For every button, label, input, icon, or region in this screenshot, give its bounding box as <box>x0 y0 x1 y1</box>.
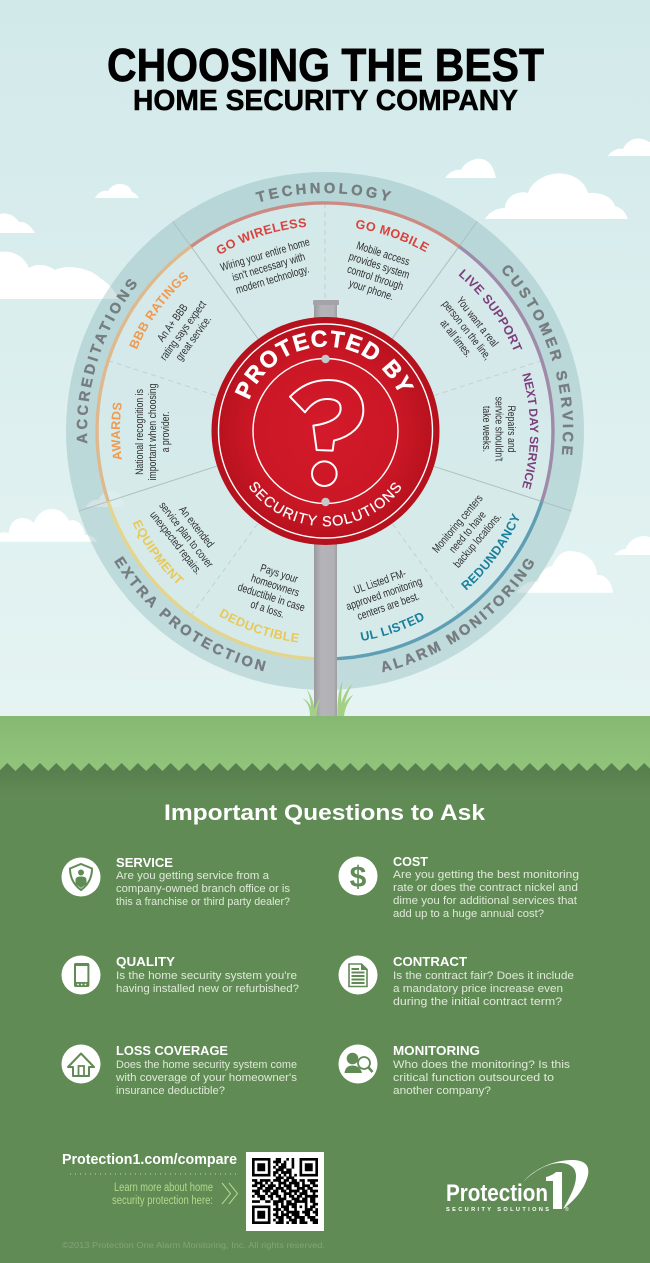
chevrons arrow <box>222 1183 238 1204</box>
icon: shield <box>62 858 100 896</box>
text: go wireless: Wiring your entire home <box>219 236 312 274</box>
dashed dividers <box>108 203 542 615</box>
logo tagline: SECURITY SOLUTIONS <box>446 1207 549 1213</box>
text: bbb ratings: great service. <box>174 314 215 363</box>
icon: document <box>338 956 378 994</box>
question: monitoring: Who does the monitoring? Is this <box>393 1059 570 1071</box>
dark green panel <box>0 763 650 1263</box>
wheel outer ring <box>66 172 584 690</box>
question: service: this a franchise or third party dealer? <box>116 896 290 908</box>
text: redundancy: need to have <box>447 509 489 556</box>
label: deductible: DEDUCTIBLE <box>219 608 299 642</box>
section name: customer service: CUSTOMER SERVICE <box>502 265 574 455</box>
question: loss coverage: LOSS COVERAGE <box>116 1043 228 1058</box>
question: quality: having installed new or refurbished? <box>116 983 299 995</box>
question: cost: COST <box>393 854 428 869</box>
text: ul listed: UL Listed FM- <box>352 568 408 597</box>
text: go mobile: your phone. <box>347 278 395 304</box>
text: ul listed: approved monitoring <box>345 576 424 613</box>
text: awards: National recognition is <box>134 389 146 475</box>
label: next day service: NEXT DAY SERVICE <box>522 372 538 490</box>
question: contract: Is the contract fair? Does it include <box>393 970 574 982</box>
text: live support: You want a real <box>454 295 500 350</box>
question: cost <box>338 854 579 920</box>
text: redundancy: backup locations. <box>452 511 504 571</box>
question mark <box>290 380 363 486</box>
text: bbb ratings: An A+ BBB <box>155 302 191 345</box>
question: loss coverage: insurance deductible? <box>116 1085 225 1097</box>
logo wordmark: Protection <box>446 1180 548 1207</box>
sign post <box>313 300 339 717</box>
text: next day service: service shouldn't <box>492 397 504 462</box>
text: deductible: of a loss. <box>249 599 286 621</box>
label: bbb ratings: BBB RATINGS <box>129 272 188 350</box>
colored arcs <box>97 203 553 659</box>
icon: dollar <box>338 856 378 896</box>
text: live support: at all times. <box>437 318 474 360</box>
text: next day service: take weeks. <box>480 406 492 452</box>
text: go mobile: provides system <box>347 251 411 282</box>
grass tufts <box>303 681 353 716</box>
icon: person and magnifier <box>338 1044 378 1084</box>
title: HOME SECURITY COMPANY <box>133 85 518 117</box>
section name: accreditations: ACCREDITATIONS <box>76 279 137 444</box>
question: cost: Are you getting the best monitoring <box>393 869 579 881</box>
section name: alarm monitoring: ALARM MONITORING <box>382 558 534 672</box>
question: contract: during the initial contract term? <box>393 996 562 1008</box>
icon: house <box>62 1044 100 1084</box>
question: monitoring: critical function outsourced to <box>393 1072 554 1084</box>
lawn <box>0 716 650 772</box>
sign text: security solutions: SECURITY SOLUTIONS <box>250 482 401 526</box>
text: redundancy: Monitoring centers <box>430 493 486 556</box>
question: contract: CONTRACT <box>393 954 467 969</box>
text: go wireless: modern technology. <box>234 264 311 297</box>
sign text: protected by: PROTECTED BY <box>234 330 414 400</box>
question: contract <box>338 954 574 1008</box>
text: equipment: An extended <box>176 504 216 550</box>
question: monitoring: MONITORING <box>393 1043 480 1058</box>
footer learn more text: Learn more about home <box>114 1182 213 1194</box>
text: next day service: Repairs and <box>505 405 517 453</box>
question: service: SERVICE <box>116 855 173 870</box>
question: cost: rate or does the contract nickel and <box>393 882 578 894</box>
text: equipment: service plan to cover <box>156 500 215 571</box>
question: loss coverage: Does the home security system come <box>116 1059 297 1071</box>
label: awards: AWARDS <box>111 402 122 460</box>
bolts <box>321 355 330 506</box>
section name: extra protection: EXTRA PROTECTION <box>114 556 266 672</box>
question: service: Are you getting service from a <box>116 870 270 882</box>
section name: technology: TECHNOLOGY <box>255 182 392 202</box>
sign <box>212 317 440 545</box>
question: service: company-owned branch office or is <box>116 883 290 895</box>
logo swoosh <box>523 1160 588 1209</box>
text: deductible: homeowners <box>249 573 301 600</box>
text: equipment: unexpected repairs. <box>147 509 204 577</box>
text: awards: important when choosing <box>147 383 159 481</box>
question: quality <box>62 954 299 995</box>
label: go mobile: GO MOBILE <box>356 220 430 252</box>
icon: tablet <box>62 956 100 994</box>
icon: dollar: $ <box>350 861 367 894</box>
question: monitoring <box>338 1043 570 1097</box>
text: ul listed: centers are best. <box>356 591 421 623</box>
question: contract: a mandatory price increase even <box>393 983 563 995</box>
text: bbb ratings: rating says expect <box>158 299 209 363</box>
wheel inner disk <box>97 203 553 659</box>
title <box>107 39 544 117</box>
question: monitoring: another company? <box>393 1085 491 1097</box>
label: redundancy: REDUNDANCY <box>460 512 520 590</box>
question: quality: QUALITY <box>116 954 175 969</box>
question: service <box>62 855 290 908</box>
title: CHOOSING THE BEST <box>107 39 544 91</box>
question: loss coverage <box>62 1043 297 1097</box>
question: loss coverage: with coverage of your homeowner's <box>115 1072 297 1084</box>
label: go wireless: GO WIRELESS <box>216 218 306 254</box>
text: live support: person on the line, <box>439 299 493 363</box>
heading: important questions: Important Questions to Ask <box>164 800 486 825</box>
logo registered mark: ® <box>565 1206 569 1213</box>
qr code <box>246 1152 324 1231</box>
question: quality: Is the home security system you're <box>116 970 297 982</box>
text: go mobile: Mobile access <box>355 240 411 269</box>
solid dividers <box>79 221 571 511</box>
text: deductible: Pays your <box>259 563 300 586</box>
logo numeral <box>546 1172 562 1209</box>
question: cost: add up to a huge annual cost? <box>393 908 544 920</box>
question: cost: dime you for additional services that <box>393 895 578 907</box>
clouds <box>0 138 650 593</box>
label: ul listed: UL LISTED <box>360 613 424 640</box>
wheel <box>66 172 584 690</box>
sky background <box>0 0 650 717</box>
text: go wireless: isn't necessary with <box>231 251 307 284</box>
footer url: Protection1.com/compare <box>62 1152 237 1168</box>
label: equipment: EQUIPMENT <box>132 520 184 584</box>
copyright: ©2013 Protection One Alarm Monitoring, Inc. All rights reserved. <box>62 1240 325 1250</box>
label: live support: LIVE SUPPORT <box>458 269 522 350</box>
footer learn more text <box>112 1182 213 1207</box>
footer learn more text: security protection here: <box>112 1195 213 1207</box>
text: deductible: deductible in case <box>236 581 307 615</box>
text: go mobile: control through <box>345 264 405 293</box>
text: awards: a provider. <box>160 412 172 452</box>
logo: protection 1 <box>446 1160 588 1213</box>
